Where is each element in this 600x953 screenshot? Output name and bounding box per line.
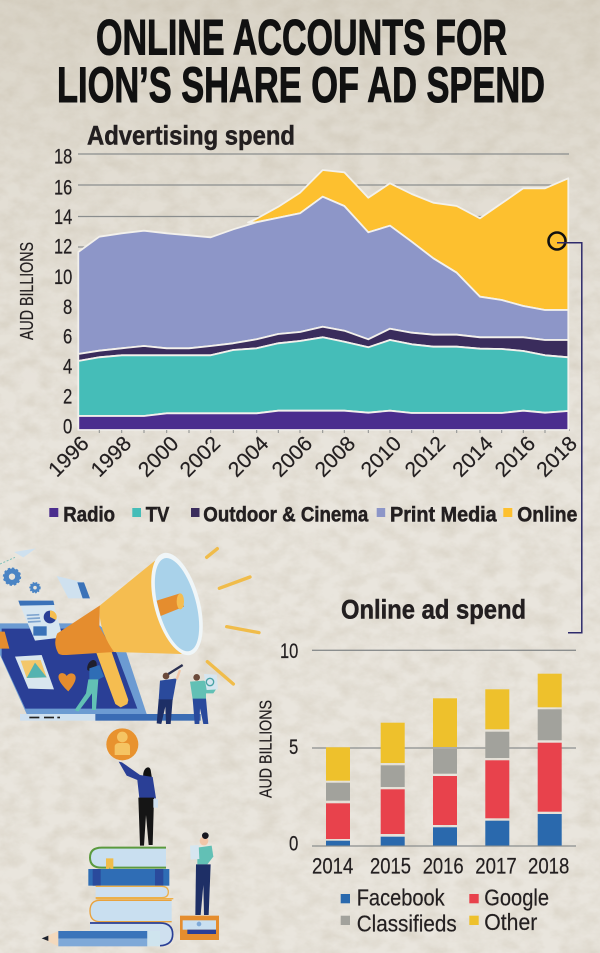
area: outdoor and cinema xyxy=(78,327,568,361)
legend: advertising spend: Online xyxy=(517,504,577,527)
y axis labels: online ad spend: 10 xyxy=(280,640,298,663)
x axis labels: online ad spend: 2017 xyxy=(475,854,517,878)
x axis labels: advertising spend: 1998 xyxy=(87,432,136,482)
illustration: megaphone and laptop xyxy=(0,547,259,724)
legend: advertising spend: Outdoor & Cinema xyxy=(203,504,369,527)
figure: woman on laptop xyxy=(75,660,104,712)
illustration: books and figures xyxy=(42,728,219,946)
y axis labels: advertising spend: 18 xyxy=(54,145,72,168)
figure: woman reaching xyxy=(119,762,158,846)
icon: user badge xyxy=(106,728,138,760)
x axis labels: advertising spend: 2000 xyxy=(134,432,183,482)
y axis labels: advertising spend: 16 xyxy=(54,176,72,199)
y axis labels: advertising spend: 10 xyxy=(54,266,72,289)
x axis labels: online ad spend: 2018 xyxy=(528,854,569,878)
bar: 2014 xyxy=(326,747,350,846)
x axis labels: advertising spend: 2004 xyxy=(224,432,274,482)
area: radio xyxy=(78,411,568,430)
heading: advertising spend: Advertising spend xyxy=(87,120,295,150)
y axis labels: online ad spend xyxy=(280,640,298,856)
area chart: advertising spend xyxy=(78,154,570,433)
y axis title: online ad spend: AUD BILLIONS xyxy=(256,700,276,798)
megaphone horn xyxy=(55,547,213,661)
x axis labels: advertising spend: 2016 xyxy=(491,432,540,482)
area: print media xyxy=(78,197,568,354)
picture card on laptop xyxy=(15,655,54,689)
y axis labels: online ad spend: 5 xyxy=(289,736,298,759)
area: online xyxy=(248,170,568,310)
legend: advertising spend: TV xyxy=(146,504,169,527)
x axis labels: online ad spend: 2014 xyxy=(312,854,353,878)
y axis labels: advertising spend: 6 xyxy=(63,325,72,348)
icon: gears xyxy=(4,568,40,593)
legend: online ad spend: Google xyxy=(484,885,549,911)
bar: 2018 xyxy=(538,674,562,846)
area: tv xyxy=(78,337,568,416)
icon: folder card xyxy=(57,576,90,598)
icon: paper plane xyxy=(0,548,36,564)
laptop base xyxy=(20,714,201,721)
bar: 2015 xyxy=(381,723,405,846)
y axis labels: online ad spend: 0 xyxy=(289,832,298,856)
y axis labels: advertising spend xyxy=(54,145,73,438)
figure: man with telescope xyxy=(157,665,183,724)
y axis labels: advertising spend: 2 xyxy=(63,385,72,408)
legend: online ad spend: Classifieds xyxy=(357,911,457,937)
megaphone handle xyxy=(96,652,128,707)
y axis labels: advertising spend: 14 xyxy=(54,206,73,229)
legend: online ad spend xyxy=(341,885,549,937)
books stack xyxy=(88,848,173,946)
x axis labels: advertising spend: 2014 xyxy=(448,432,498,482)
x axis labels: online ad spend xyxy=(312,854,569,878)
megaphone sound rays xyxy=(207,549,259,684)
icon: heart xyxy=(58,673,76,691)
y axis labels: advertising spend: 0 xyxy=(63,415,72,438)
x axis labels: advertising spend: 2018 xyxy=(532,432,582,482)
stacked bar chart: online ad spend xyxy=(312,650,576,846)
x axis labels: online ad spend: 2016 xyxy=(423,854,464,878)
y axis labels: advertising spend: 4 xyxy=(63,355,73,378)
pencil sharpener box xyxy=(180,916,219,940)
connector from online area to online ad spend chart xyxy=(548,232,582,633)
icon: pencil xyxy=(42,931,160,946)
x axis labels: advertising spend: 2008 xyxy=(311,432,360,482)
x axis labels: advertising spend xyxy=(44,432,582,482)
x axis labels: advertising spend: 1996 xyxy=(44,432,94,482)
legend: advertising spend xyxy=(49,504,577,527)
figure: woman reading xyxy=(190,832,213,915)
heading: online ad spend: Online ad spend xyxy=(341,594,526,624)
figure: man with target xyxy=(190,674,218,724)
legend: advertising spend: Print Media xyxy=(390,504,497,527)
floating document with chart xyxy=(18,601,63,641)
bar: 2017 xyxy=(485,689,509,846)
title xyxy=(57,10,545,113)
x axis labels: advertising spend: 2002 xyxy=(176,432,225,482)
laptop screen xyxy=(0,623,147,714)
legend: online ad spend: Other xyxy=(484,909,538,935)
y axis labels: advertising spend: 8 xyxy=(63,296,72,319)
y axis title: advertising spend: AUD BILLIONS xyxy=(17,242,37,340)
bar: 2016 xyxy=(433,698,457,846)
x axis labels: online ad spend: 2015 xyxy=(370,854,411,878)
y axis labels: advertising spend: 12 xyxy=(54,235,72,258)
legend: advertising spend: Radio xyxy=(63,504,115,527)
legend: online ad spend: Facebook xyxy=(357,885,445,911)
x axis labels: advertising spend: 2010 xyxy=(357,432,406,482)
x axis labels: advertising spend: 2012 xyxy=(401,432,450,482)
x axis labels: advertising spend: 2006 xyxy=(268,432,317,482)
